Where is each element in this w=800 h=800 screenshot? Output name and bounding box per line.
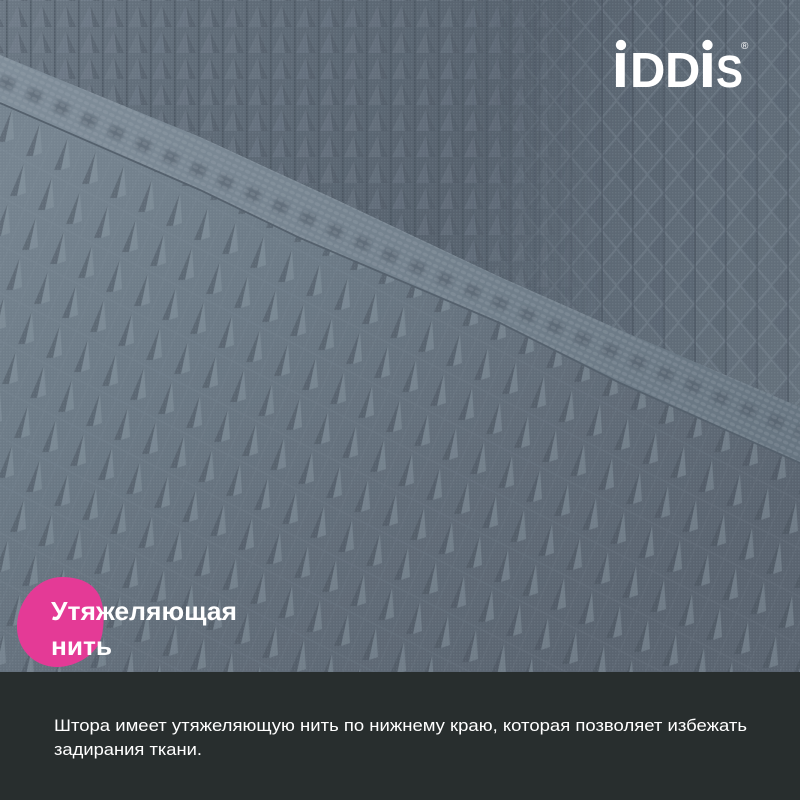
heading: Утяжеляющая [51, 596, 237, 626]
footer description text: Штора имеет утяжеляющую нить по нижнему краю, которая позволяет избежать [54, 717, 747, 735]
footer description text [54, 717, 747, 759]
curtain weighted hem fold [0, 55, 800, 463]
brand logo: iDDiS [616, 40, 748, 88]
heading: нить [51, 631, 112, 661]
footer panel [0, 672, 800, 800]
brand logo: iDDiS: ® [741, 41, 749, 52]
brand logo: iDDiS: D [630, 44, 665, 98]
footer description text: задирания ткани. [54, 741, 202, 759]
brand logo: iDDiS: S [716, 46, 743, 97]
heading [51, 596, 237, 661]
background: upper curtain fabric [0, 0, 800, 407]
brand logo: iDDiS: D [665, 44, 700, 98]
brand logo: iDDiS: i [698, 29, 716, 101]
brand logo: iDDiS: i [612, 29, 629, 101]
pink blob behind heading [17, 577, 104, 667]
background: lower curtain fabric [0, 90, 800, 680]
